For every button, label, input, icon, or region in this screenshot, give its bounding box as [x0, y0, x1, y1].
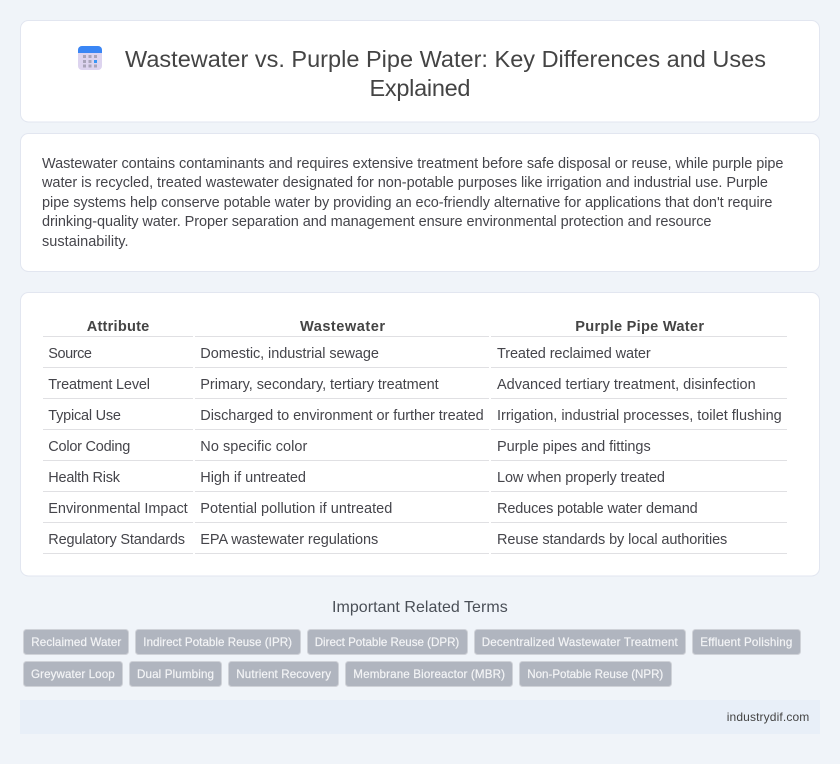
tag: Nutrient Recovery: Nutrient Recovery	[236, 668, 331, 681]
tag: Reclaimed Water: Reclaimed Water	[31, 636, 121, 649]
table header	[43, 319, 787, 337]
tag: Dual Plumbing: Dual Plumbing	[137, 668, 214, 681]
panel: comparison table	[20, 292, 820, 576]
panel: title header	[20, 20, 820, 122]
tag: Non-Potable Reuse	[520, 662, 672, 686]
title: Explained	[370, 75, 470, 101]
table row: health risk	[43, 470, 787, 492]
title: Wastewater vs. Purple Pipe Water: Key Differences and Uses	[125, 46, 766, 72]
tag: Membrane Bioreactor: Membrane Bioreactor (MBR)	[353, 668, 505, 681]
table row: treatment level: Advanced tertiary treatment, disinfection	[497, 377, 756, 393]
table row: source: Source	[48, 346, 92, 362]
table row: source	[43, 346, 787, 368]
table header: Purple Pipe Water	[575, 319, 704, 335]
table row: typical use: Typical Use	[48, 408, 121, 424]
table row: regulatory standards: Reuse standards by local authorities	[497, 532, 727, 548]
tag: Direct Potable Reuse	[308, 630, 468, 654]
table row: source: Domestic, industrial sewage	[200, 346, 379, 362]
table row: regulatory standards: EPA wastewater regulations	[200, 532, 378, 548]
icon: calendar	[78, 46, 102, 70]
tag: Greywater Loop	[24, 662, 122, 686]
text block: description paragraph: Wastewater contains contaminants and requires extensive treatment before safe disposal or reuse, while purple pipe	[42, 156, 784, 172]
heading: related terms: Important Related Terms	[332, 599, 508, 616]
footer	[20, 700, 820, 734]
table header: Wastewater	[300, 319, 385, 335]
tag: Indirect Potable Reuse: Indirect Potable Reuse (IPR)	[143, 636, 292, 649]
text block: description paragraph	[41, 156, 784, 250]
tag: Effluent Polishing: Effluent Polishing	[700, 636, 792, 649]
tag: Nutrient Recovery	[228, 662, 338, 686]
table row: color coding	[43, 439, 787, 461]
table row: health risk: High if untreated	[200, 470, 306, 486]
related term tags	[24, 630, 800, 686]
table row: source: Treated reclaimed water	[497, 346, 651, 362]
table row: color coding: Color Coding	[48, 439, 130, 455]
table row: environmental impact	[43, 501, 787, 523]
table row: color coding: No specific color	[200, 439, 307, 455]
table row: treatment level: Treatment Level	[48, 377, 150, 393]
table row: treatment level: Primary, secondary, tertiary treatment	[200, 377, 439, 393]
text block: description paragraph: drinking-quality water. Proper separation and management ensure environmental protection and resource	[42, 214, 712, 230]
tag: Indirect Potable Reuse	[136, 630, 300, 654]
tag: Decentralized Wastewater Treatment: Decentralized Wastewater Treatment	[482, 636, 678, 649]
table row: typical use: Irrigation, industrial processes, toilet flushing	[497, 408, 782, 424]
table row: health risk: Health Risk	[48, 470, 121, 486]
text block: description paragraph: sustainability.	[42, 234, 128, 250]
table header: Attribute	[87, 319, 149, 335]
tag: Dual Plumbing	[130, 662, 222, 686]
tag: Decentralized Wastewater Treatment	[474, 630, 686, 654]
tag: Direct Potable Reuse: Direct Potable Reuse (DPR)	[315, 636, 459, 649]
table row: typical use: Discharged to environment or further treated	[200, 408, 484, 424]
tag: Effluent Polishing	[692, 630, 800, 654]
table row: environmental impact: Potential pollution if untreated	[200, 501, 392, 517]
table row: health risk: Low when properly treated	[497, 470, 665, 486]
tag: Non-Potable Reuse: Non-Potable Reuse (NPR)	[527, 668, 663, 681]
table row: regulatory standards: Regulatory Standards	[48, 532, 185, 548]
table row: regulatory standards	[43, 532, 787, 554]
tag: Membrane Bioreactor	[346, 662, 512, 686]
tag: Reclaimed Water	[24, 630, 128, 654]
panel: description	[20, 134, 820, 272]
title	[125, 46, 766, 101]
table row: environmental impact: Reduces potable water demand	[497, 501, 698, 517]
footer: industrydif.com	[727, 710, 809, 724]
table row: typical use	[43, 408, 787, 430]
table row: treatment level	[43, 377, 787, 399]
text block: description paragraph: water is recycled, treated wastewater designated for non-potable purposes like irrigation and industrial use. Purple	[41, 175, 768, 191]
table row: environmental impact: Environmental Impact	[48, 501, 188, 517]
table row: color coding: Purple pipes and fittings	[497, 439, 651, 455]
text block: description paragraph: pipe systems help conserve potable water by providing an eco-friendly alternative for applications that don't require	[42, 195, 772, 211]
tag: Greywater Loop: Greywater Loop	[31, 668, 115, 681]
